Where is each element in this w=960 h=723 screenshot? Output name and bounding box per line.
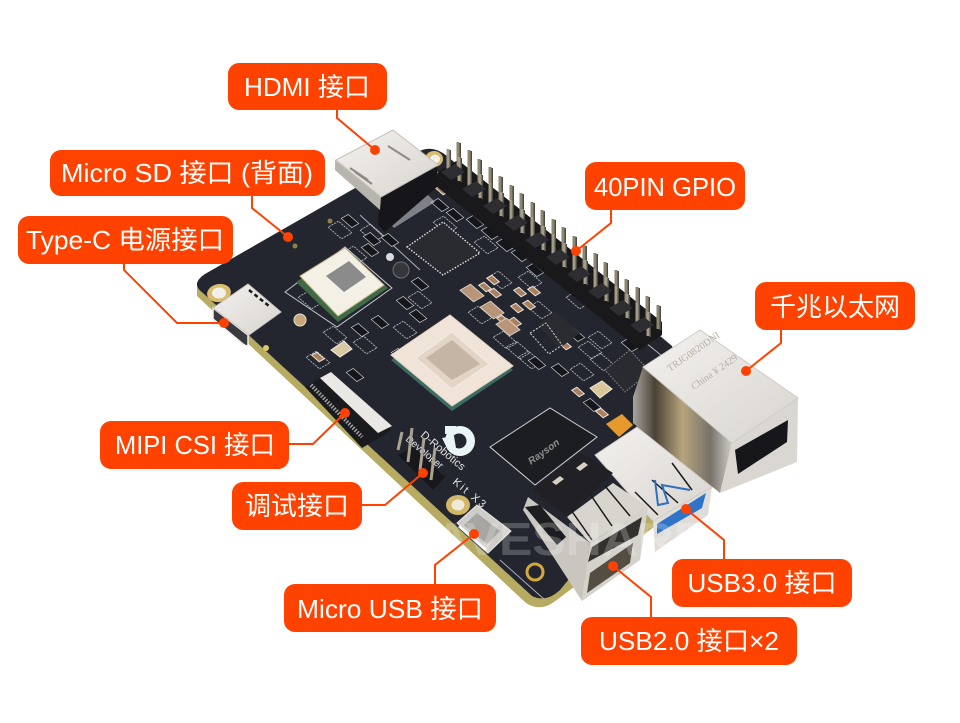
callout: Micro USB xyxy=(284,529,496,632)
tantalum capacitor xyxy=(606,414,633,437)
logo xyxy=(442,426,475,456)
callout: MIPI CSI xyxy=(100,408,350,469)
board edge xyxy=(197,286,690,607)
callout: USB2.0 xyxy=(581,561,797,665)
front face xyxy=(582,507,648,601)
Type-C connector xyxy=(213,284,281,346)
callout: HDMI xyxy=(228,63,387,155)
IC right xyxy=(538,312,580,348)
lower port xyxy=(587,543,633,593)
black plastic xyxy=(532,452,613,517)
crystal xyxy=(331,341,352,357)
callout: gigabit ethernet: 千兆以太网 xyxy=(770,292,900,322)
watermark: WAVESHARE xyxy=(389,513,707,565)
WiFi antenna socket xyxy=(294,314,306,326)
callout: USB3.0 xyxy=(672,504,852,607)
Ethernet connector: TRJG0820DNI xyxy=(665,330,722,374)
callout: Type-C: Type-C 电源接口 xyxy=(26,225,224,255)
callout: HDMI: HDMI 接口 xyxy=(244,72,370,102)
FPC camera connector xyxy=(305,372,392,448)
mounting hole: top xyxy=(425,151,443,167)
board silkscreen text xyxy=(403,429,489,512)
top metal xyxy=(567,483,648,543)
silkscreen details xyxy=(263,172,662,600)
callout: debug port: 调试接口 xyxy=(245,491,349,521)
Ethernet connector xyxy=(633,330,798,493)
SoC xyxy=(391,315,513,411)
crystal near memory xyxy=(590,381,612,398)
USB2.0 double connector xyxy=(523,452,648,601)
callout: MIPI CSI: MIPI CSI 接口 xyxy=(115,430,275,460)
board surface xyxy=(197,149,700,598)
callout: Type-C xyxy=(18,216,233,328)
debug header xyxy=(398,428,445,490)
callout: Micro SD: Micro SD 接口 (背面) xyxy=(61,158,313,188)
memory chip xyxy=(490,408,597,485)
callout: Micro SD xyxy=(50,150,325,242)
mounting hole: connector side xyxy=(527,564,543,580)
callout: USB2.0: USB2.0 接口×2 xyxy=(599,626,779,656)
board xyxy=(197,149,700,607)
upper port xyxy=(588,517,642,562)
HDMI traces xyxy=(386,195,435,228)
IC near ethernet xyxy=(605,350,650,392)
callout: Micro USB: Micro USB 接口 xyxy=(297,594,483,624)
side wall xyxy=(523,497,590,601)
Micro USB connector xyxy=(457,505,511,553)
HDMI connector xyxy=(335,130,438,232)
inductor xyxy=(393,262,409,278)
callout: gigabit ethernet xyxy=(741,282,915,376)
board silkscreen text: Developer xyxy=(403,434,446,472)
LED xyxy=(386,253,394,261)
mounting hole: left xyxy=(206,282,232,304)
callout: debug port xyxy=(232,468,428,530)
TQFP chip xyxy=(407,222,480,275)
Ethernet connector: China ¥ 2429 xyxy=(689,353,740,392)
board silkscreen text: D-Robotics xyxy=(418,429,468,474)
board silkscreen text: Kit X3 xyxy=(450,476,489,512)
mounting hole: bottom xyxy=(446,495,470,515)
40PIN GPIO header xyxy=(436,142,662,350)
callout: USB3.0: USB3.0 接口 xyxy=(688,568,836,598)
callout: 40PIN GPIO: 40PIN GPIO xyxy=(594,172,736,202)
module chip xyxy=(296,250,388,322)
memory chip: Rayson xyxy=(526,437,562,467)
USB3.0 connector xyxy=(595,427,712,552)
callout: 40PIN GPIO xyxy=(571,162,745,256)
